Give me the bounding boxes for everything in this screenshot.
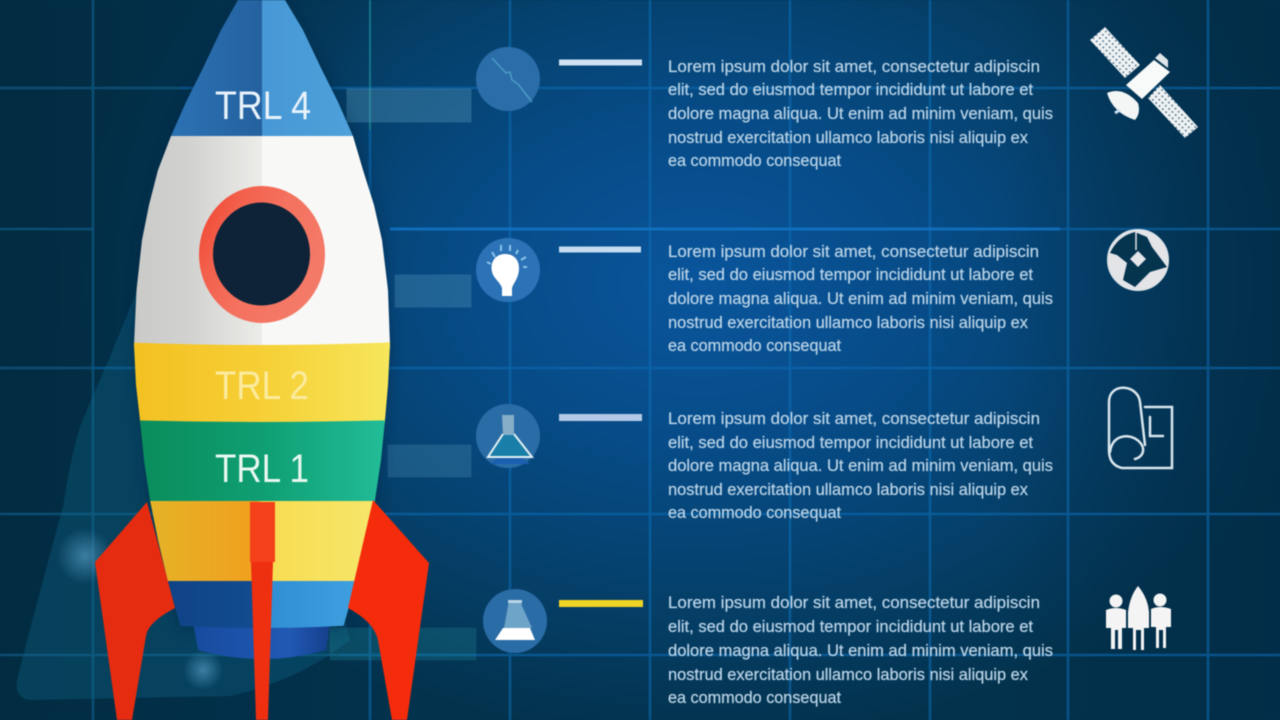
text block 3: nostrud exercitation ullamco laboris nisi aliquip ex xyxy=(668,481,1029,499)
text block 3: ea commodo consequat xyxy=(668,504,841,522)
text block 2: elit, sed do eiusmod tempor incididunt ut labore et xyxy=(668,266,1033,284)
text block 4: ea commodo consequat xyxy=(668,689,841,707)
nozzle xyxy=(193,622,330,659)
rocket shadow xyxy=(134,0,390,628)
text block 1 xyxy=(668,58,1053,170)
label TRL 4: TRL 4 xyxy=(215,84,311,128)
icon circle: beaker xyxy=(483,589,547,653)
bar 1 xyxy=(559,60,642,66)
text block 3: dolore magna aliqua. Ut enim ad minim veniam, quis xyxy=(668,457,1053,475)
text block 1: nostrud exercitation ullamco laboris nisi aliquip ex xyxy=(668,129,1029,147)
translucent connector: TRL 4 xyxy=(347,89,471,122)
centre fin xyxy=(250,502,275,720)
text block 2: dolore magna aliqua. Ut enim ad minim veniam, quis xyxy=(668,290,1053,308)
bar 4 xyxy=(559,600,643,607)
icon circle: flask xyxy=(476,404,540,468)
text block 4: nostrud exercitation ullamco laboris nisi aliquip ex xyxy=(668,666,1029,684)
translucent connector: TRL 1 xyxy=(330,628,476,660)
text block 4: dolore magna aliqua. Ut enim ad minim veniam, quis xyxy=(668,642,1053,660)
text block 2 xyxy=(668,243,1053,355)
label TRL 1: TRL 1 xyxy=(215,447,309,491)
text block 3: elit, sed do eiusmod tempor incididunt ut labore et xyxy=(668,434,1033,452)
porthole xyxy=(199,186,325,323)
right fin xyxy=(348,500,429,720)
text block 1: elit, sed do eiusmod tempor incididunt ut labore et xyxy=(668,81,1033,99)
text block 3 xyxy=(668,410,1053,522)
text block 2: nostrud exercitation ullamco laboris nisi aliquip ex xyxy=(668,314,1029,332)
icon circle: rocket trail xyxy=(476,47,540,111)
icon circle: light bulb xyxy=(476,238,540,302)
icon: satellite xyxy=(1090,27,1198,138)
rocket body bands xyxy=(120,0,402,628)
text block 2: ea commodo consequat xyxy=(668,337,841,355)
text block 4 xyxy=(668,594,1053,707)
rocket xyxy=(95,0,429,720)
label TRL 2: TRL 2 xyxy=(215,364,309,408)
icon: scroll blueprint xyxy=(1109,388,1172,468)
text block 1: Lorem ipsum dolor sit amet, consectetur adipiscin xyxy=(668,58,1040,76)
text block 4: elit, sed do eiusmod tempor incididunt ut labore et xyxy=(668,618,1033,636)
text block 4: Lorem ipsum dolor sit amet, consectetur adipiscin xyxy=(668,594,1040,612)
background shape behind rocket xyxy=(17,283,350,700)
text block 1: ea commodo consequat xyxy=(668,152,841,170)
bar 3 xyxy=(559,414,642,421)
bar 2 xyxy=(559,246,641,252)
glow spots xyxy=(57,528,223,690)
text block 2: Lorem ipsum dolor sit amet, consectetur adipiscin xyxy=(668,243,1039,261)
text block 1: dolore magna aliqua. Ut enim ad minim veniam, quis xyxy=(668,105,1053,123)
translucent connector: TRL 2 xyxy=(388,445,471,477)
text block 3: Lorem ipsum dolor sit amet, consectetur adipiscin xyxy=(668,410,1040,428)
icon: globe xyxy=(1108,230,1168,290)
translucent connector: TRL 3 xyxy=(395,275,471,307)
left fin xyxy=(95,502,175,720)
icon: three people xyxy=(1106,586,1171,650)
